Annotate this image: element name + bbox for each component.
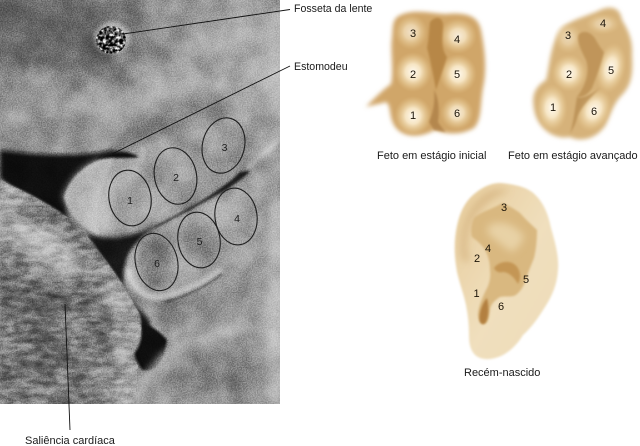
right light edge of bulge (95, 262, 129, 404)
early hillock numbers: 5 (454, 69, 460, 81)
label: lens pit: Fosseta da lente (294, 3, 372, 15)
late hillock numbers: 6 (591, 106, 597, 118)
ear numbers: 3 (501, 202, 507, 214)
groove between stomodeum and arch (96, 152, 139, 158)
hillock 6: 6 (154, 258, 160, 270)
late stage base shape (533, 8, 632, 139)
upper right light zone (171, 0, 280, 112)
late central groove (577, 32, 604, 97)
hillock 3 (196, 113, 251, 178)
photo base tone (0, 0, 280, 404)
early lower groove (429, 90, 446, 132)
early hillock highlights (394, 14, 477, 136)
hillock 4: 4 (234, 213, 240, 225)
second pharyngeal arch (127, 187, 264, 300)
early central groove (427, 18, 447, 90)
hillock 4 (211, 185, 261, 248)
cleft between arches (155, 171, 250, 228)
caption: early stage: Feto em estágio inicial (377, 150, 486, 162)
hillock five tone (181, 218, 217, 263)
light rim of groove (138, 147, 144, 163)
light rim of second arch (128, 268, 222, 297)
drawing: early stage fetus (366, 12, 485, 136)
large scale mottling (0, 0, 280, 404)
highlight at right of cleft (248, 140, 278, 168)
texture layer (0, 175, 145, 405)
concha (471, 203, 537, 324)
left mid band (0, 82, 110, 142)
leader line: lens pit (123, 10, 290, 34)
early stage base shape (366, 12, 485, 136)
hillock outlines and numbers (104, 113, 261, 295)
ear canal groove (479, 298, 488, 324)
first pharyngeal arch (64, 114, 285, 232)
ear numbers: 1 (473, 288, 480, 300)
early hillock numbers: 4 (454, 34, 460, 46)
shade under second arch (150, 272, 226, 332)
hillock 5 (173, 209, 225, 271)
bottom right dark tone (167, 350, 263, 394)
late hillock numbers: 2 (566, 69, 572, 81)
photo: embryo scanning micrograph (0, 0, 286, 410)
sharper arch left edge (64, 156, 116, 236)
early hillock numbers (410, 28, 460, 122)
right edge highlight (258, 2, 280, 122)
late hillock numbers: 1 (550, 102, 556, 114)
lens pit interior (96, 26, 126, 54)
shadow under the forehead (0, 150, 136, 222)
hillock 2: 2 (173, 172, 179, 184)
late hillock numbers: 5 (608, 65, 614, 77)
hillock 3: 3 (222, 142, 228, 154)
late hillock numbers: 4 (600, 18, 606, 30)
late lower groove (570, 88, 600, 134)
concha light patches (488, 223, 524, 252)
caption: late stage: Feto em estágio avançado (508, 150, 638, 162)
leader line: cardiac bulge (65, 304, 70, 430)
pale arc above the first arch (100, 75, 270, 135)
lens pit (94, 22, 130, 55)
ear numbers (473, 202, 529, 313)
hillock 2 (154, 147, 198, 205)
hillock 1: 1 (127, 195, 133, 207)
early hillock numbers: 2 (410, 69, 416, 81)
ear numbers: 4 (485, 243, 491, 255)
ear numbers: 5 (523, 274, 529, 286)
photographic grain (0, 0, 280, 404)
antihelix fold (494, 262, 520, 284)
thin dark line under second arch (165, 274, 222, 302)
right side lower tissue (140, 141, 280, 404)
ear darker helix shading (461, 189, 510, 262)
pit dark cavity (134, 323, 167, 371)
label: stomodeum: Estomodeu (294, 61, 348, 73)
bulge surface and tones (0, 175, 145, 405)
ear numbers: 6 (498, 301, 504, 313)
upper light band of bulge (0, 200, 85, 280)
early hillock numbers: 6 (454, 108, 460, 120)
dark region around second arch (85, 226, 155, 345)
ridge from pit to corner (135, 322, 280, 400)
bottom right edge light (268, 200, 284, 404)
late hillock highlights (536, 13, 631, 138)
hillock 5: 5 (197, 236, 203, 248)
leader line: stomodeum (112, 66, 290, 154)
ear numbers: 2 (474, 253, 480, 265)
drawing: late stage fetus (533, 8, 632, 139)
hillock six tone (134, 235, 178, 289)
late hillock numbers: 3 (565, 30, 571, 42)
ear outer shape (455, 183, 558, 359)
hillock 1 (108, 170, 152, 226)
early hillock numbers: 3 (410, 28, 416, 40)
caption: newborn: Recém-nascido (464, 367, 540, 379)
late hillock numbers (550, 18, 614, 118)
cardiac bulge (0, 180, 141, 404)
upper left dark zone (0, 0, 135, 80)
hillock 6 (129, 229, 184, 295)
lens texture (96, 26, 126, 54)
drawing: newborn ear (455, 183, 558, 359)
lens pit rim (94, 22, 130, 54)
early hillock numbers: 1 (410, 110, 416, 122)
